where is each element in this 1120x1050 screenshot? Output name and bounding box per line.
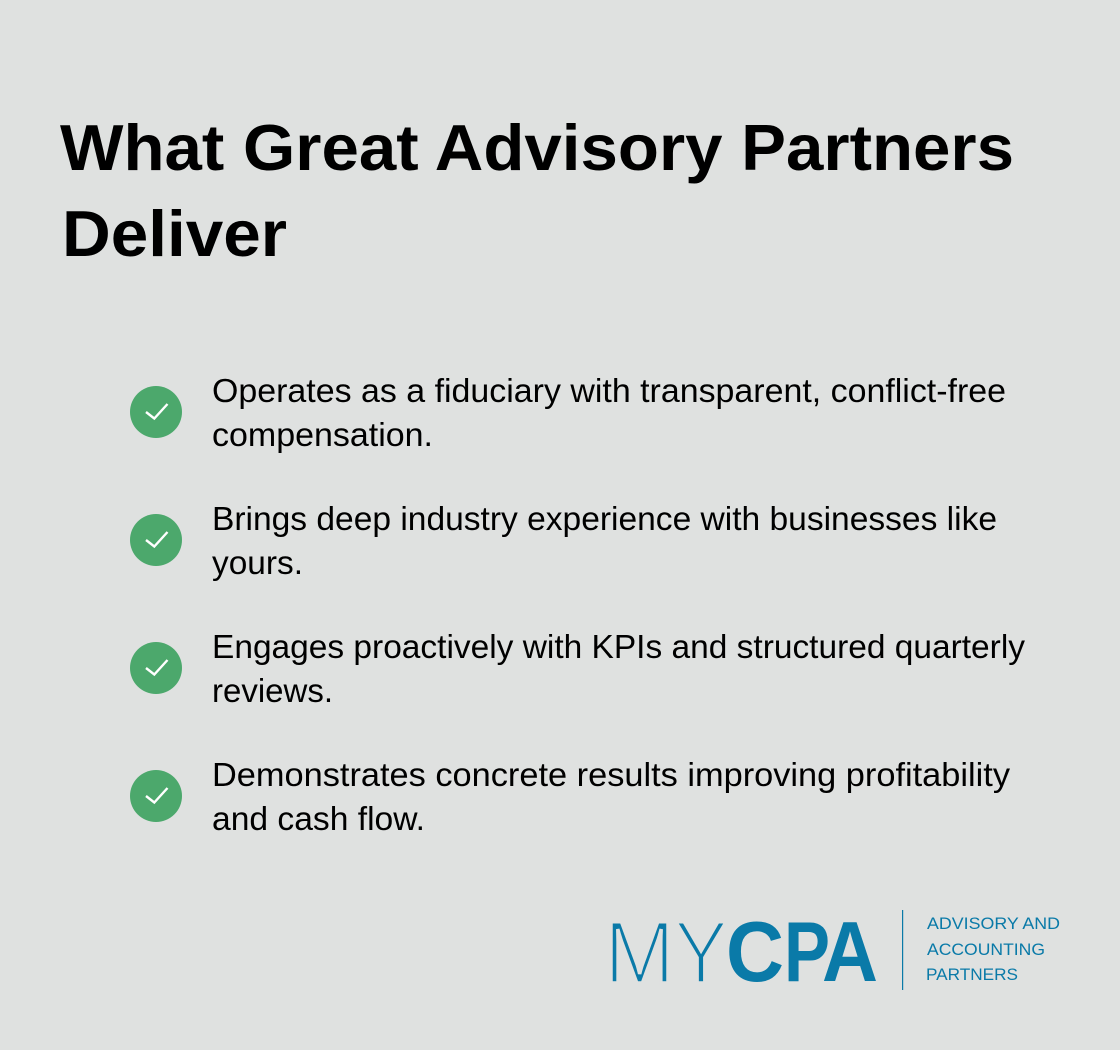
item 3: proactive engagement: Engages proactively with KPIs and structured quarterly	[212, 628, 1026, 665]
logo: Y	[674, 902, 728, 1002]
logo: PARTNERS	[926, 966, 1018, 984]
title	[60, 111, 1014, 270]
logo: M	[604, 902, 675, 1002]
logo: ACCOUNTING	[927, 941, 1045, 959]
item 2: industry experience: Brings deep industry experience with businesses like	[212, 500, 997, 537]
item 4: concrete results: Demonstrates concrete results improving profitability	[212, 756, 1011, 793]
item 4: concrete results: and cash flow.	[212, 800, 425, 837]
logo: P	[784, 905, 830, 1000]
item 4: concrete results	[130, 756, 1011, 837]
item 3: proactive engagement	[130, 628, 1026, 709]
item 2: industry experience	[130, 500, 997, 581]
logo: ADVISORY AND	[927, 915, 1060, 933]
item 2: industry experience: yours.	[212, 544, 303, 581]
item 1: fiduciary: Operates as a fiduciary with transparent, conflict-free	[212, 372, 1006, 409]
logo	[604, 902, 1060, 1002]
title: What Great Advisory Partners	[60, 111, 1014, 184]
item 1: fiduciary: compensation.	[212, 416, 433, 453]
checklist	[130, 372, 1026, 837]
logo: A	[822, 905, 878, 1000]
item 1: fiduciary	[130, 372, 1006, 453]
logo: C	[726, 905, 784, 1000]
title: Deliver	[62, 197, 287, 270]
item 3: proactive engagement: reviews.	[212, 672, 333, 709]
